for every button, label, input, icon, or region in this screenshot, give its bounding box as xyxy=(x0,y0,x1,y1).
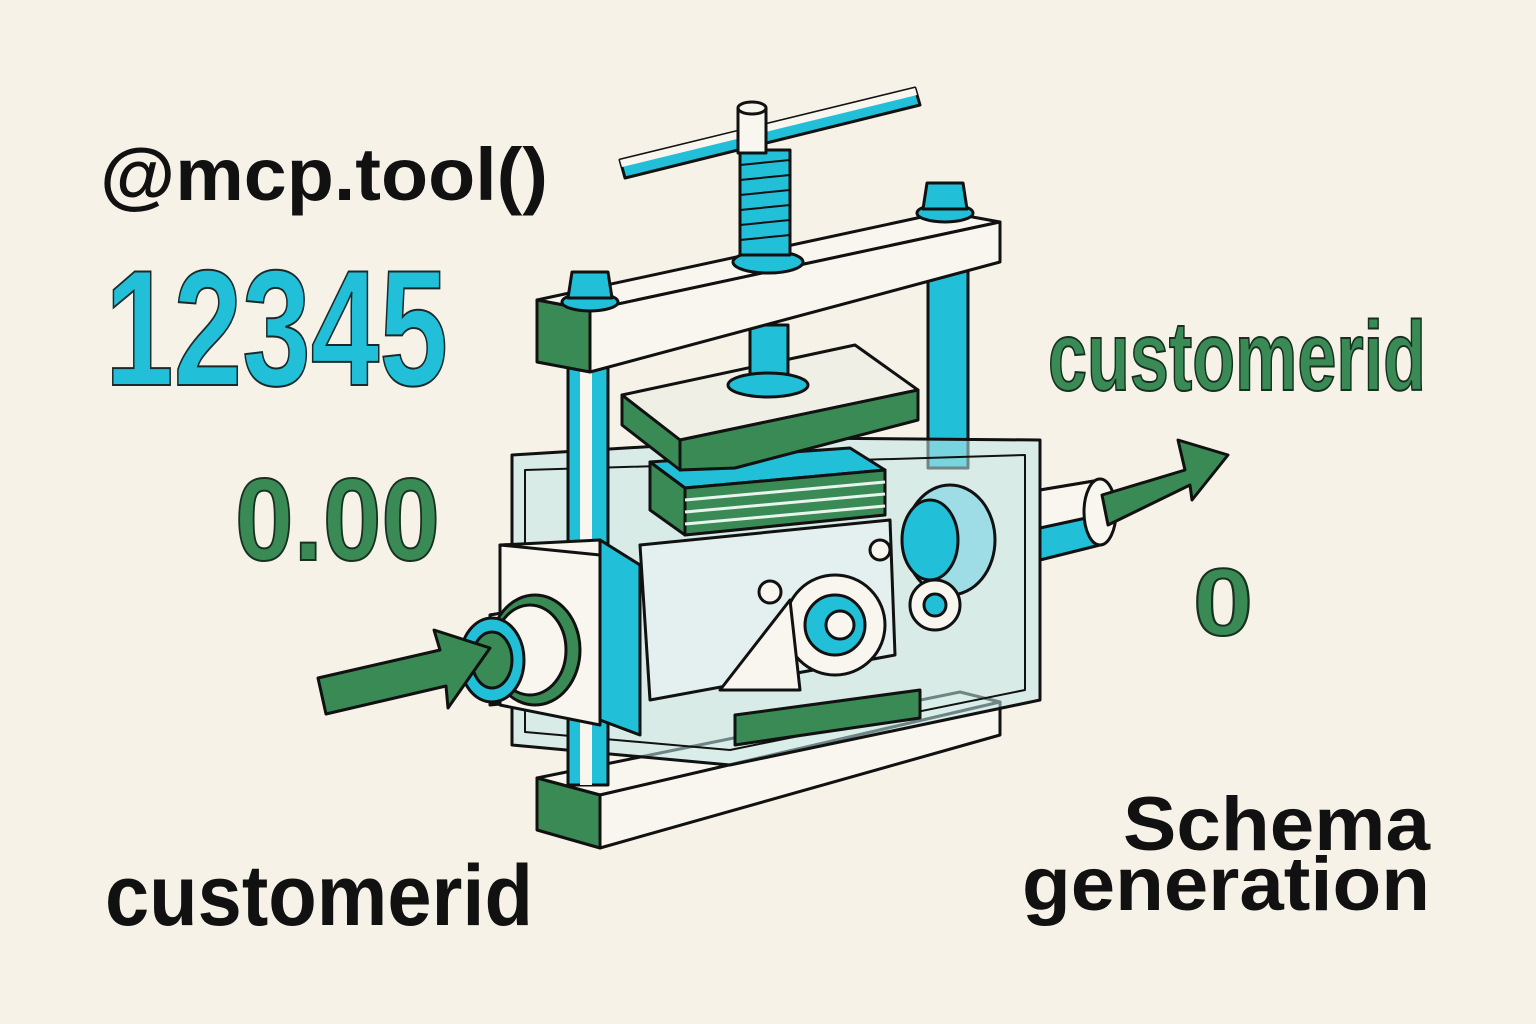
bottom plate xyxy=(735,690,920,745)
machine: press xyxy=(460,88,1116,848)
title: @mcp.tool(): @mcp.tool() xyxy=(100,133,548,216)
upper screw xyxy=(733,150,803,273)
handle xyxy=(620,88,920,178)
left column xyxy=(568,360,608,785)
number 0: 0 xyxy=(1193,549,1253,656)
lower screw and washer xyxy=(728,325,808,397)
label: customerid (black, input): customerid xyxy=(105,848,533,944)
flange block xyxy=(460,540,640,735)
number 12345: 12345 xyxy=(105,236,448,420)
arrow: output xyxy=(1102,440,1228,525)
gears xyxy=(720,485,995,690)
top beam xyxy=(537,212,1000,372)
label: Schema generation: generation xyxy=(1022,842,1430,927)
bolts xyxy=(562,183,973,311)
transparent box xyxy=(512,438,1040,765)
press plate xyxy=(622,345,918,470)
output pipe xyxy=(1040,479,1116,560)
number 0.00: 0.00 xyxy=(235,454,440,585)
label: Schema generation xyxy=(1022,782,1431,927)
label: Schema generation: Schema xyxy=(1123,782,1431,867)
base xyxy=(537,692,1000,848)
right column xyxy=(928,258,968,468)
input pipe xyxy=(490,590,640,705)
arrow: input xyxy=(318,630,490,714)
inner stack xyxy=(640,448,895,700)
